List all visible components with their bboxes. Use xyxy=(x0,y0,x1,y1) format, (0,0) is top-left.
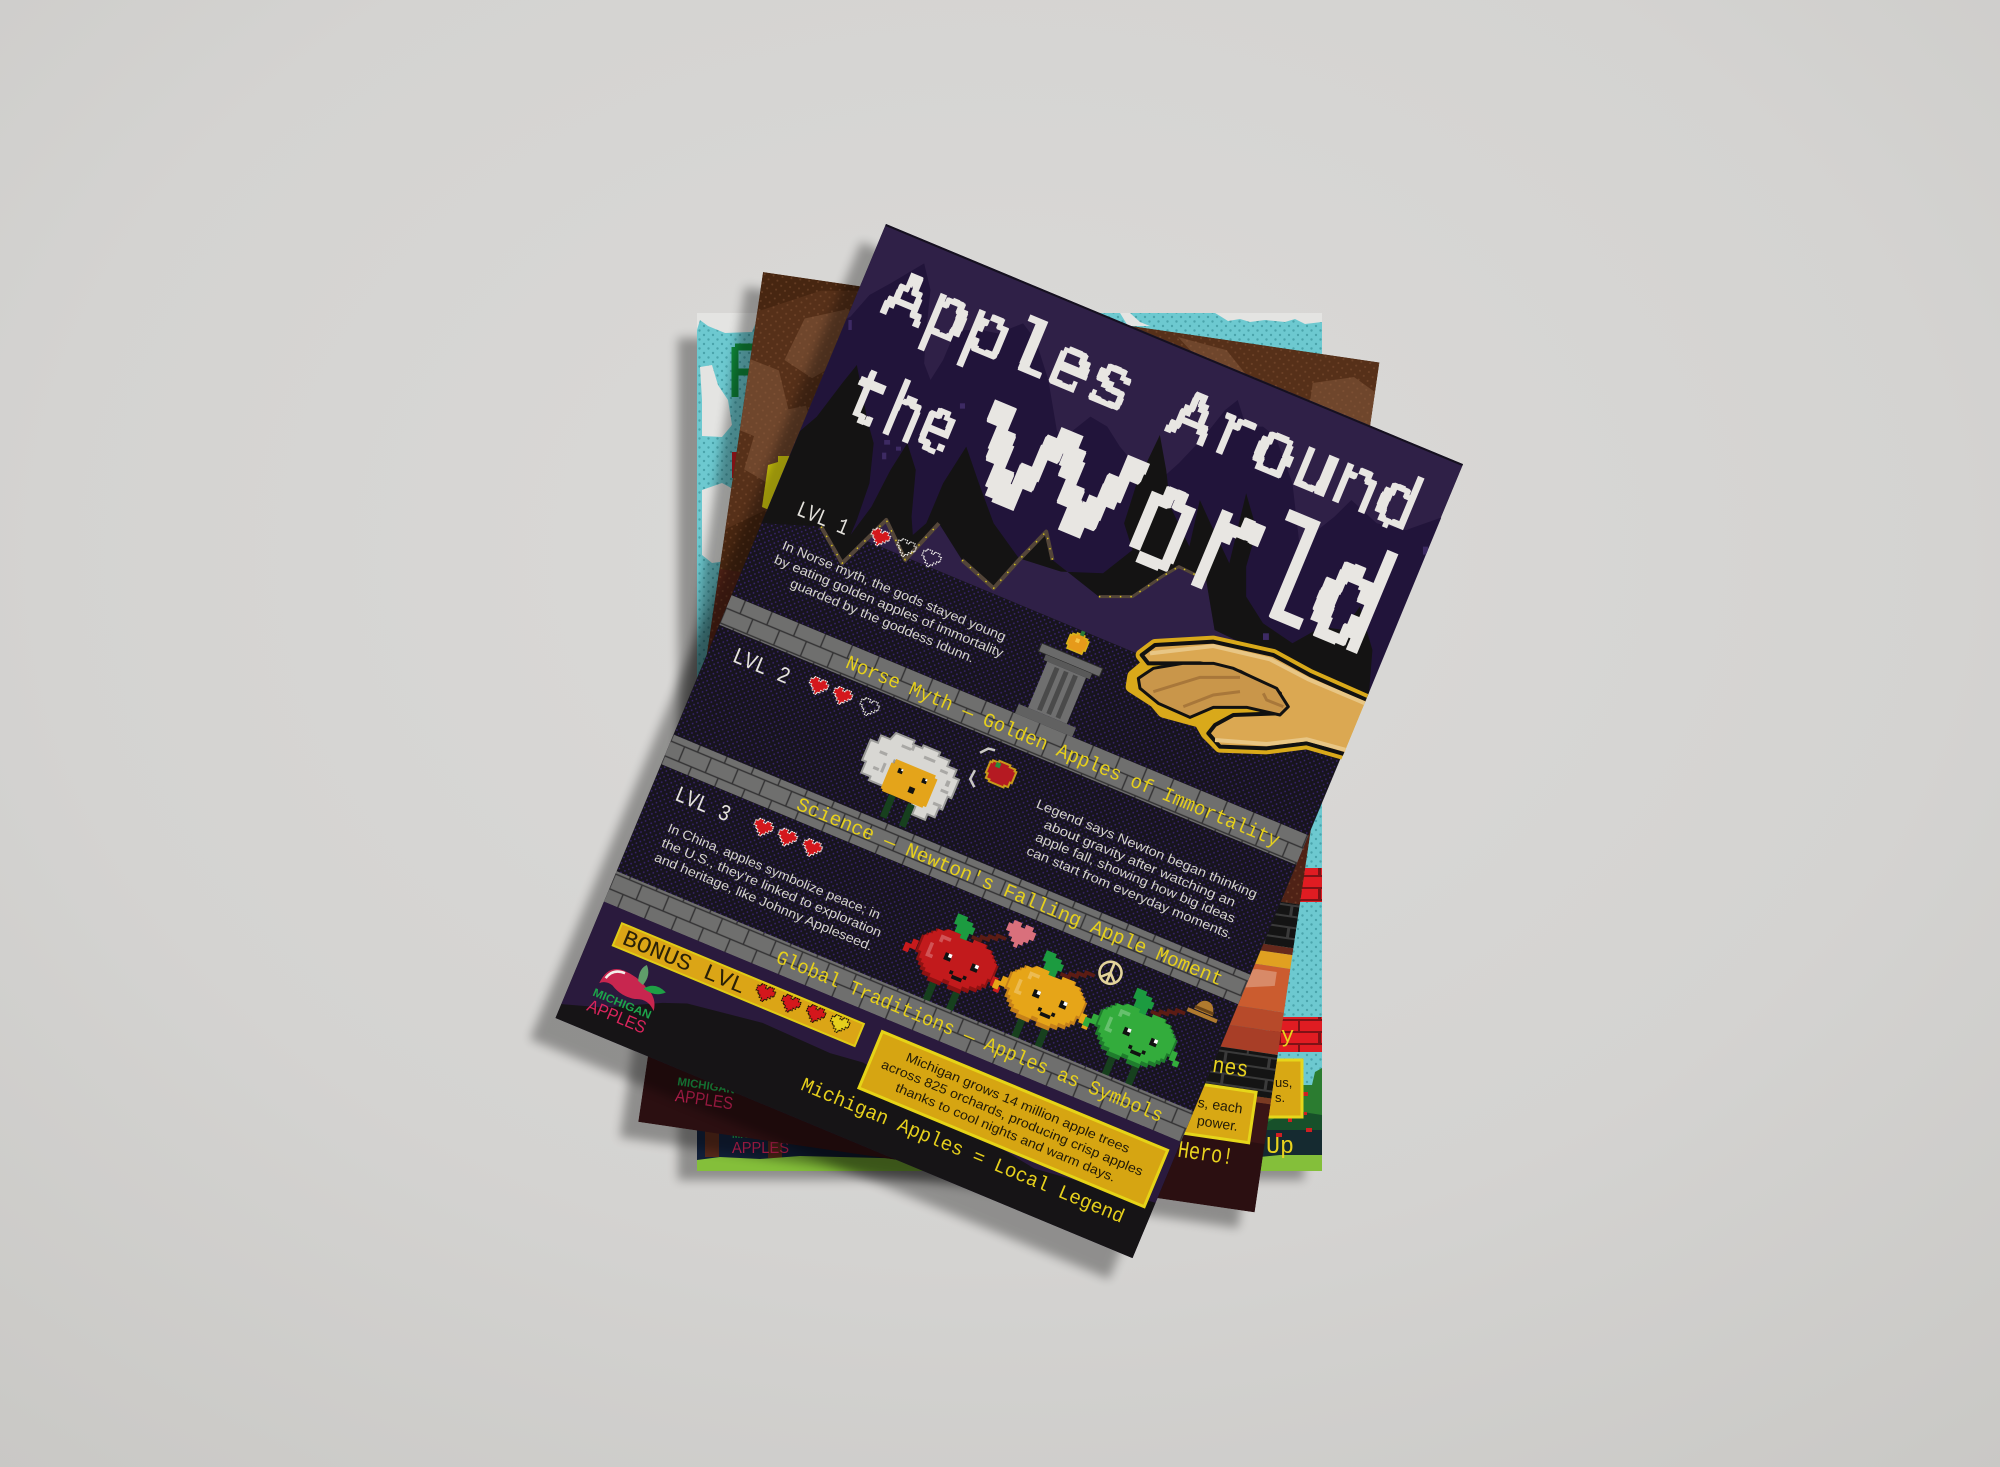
cave: rope xyxy=(821,520,1206,597)
title line 2: the xyxy=(833,355,971,479)
level 3 header xyxy=(676,786,824,857)
logo text xyxy=(732,1129,789,1157)
icon: falling apple xyxy=(968,747,1018,789)
icon: pedestal with golden apple xyxy=(1015,630,1104,737)
level 2 body text: about gravity after watching an xyxy=(1042,817,1238,910)
black brick band xyxy=(1264,902,1300,948)
bonus level bar xyxy=(612,923,864,1048)
level 1 header: LVL 1 xyxy=(793,497,853,542)
level 2 header xyxy=(733,648,880,716)
shadow: back poster xyxy=(678,338,1304,1180)
hearts xyxy=(868,527,942,570)
level 2 body text xyxy=(1027,799,1257,939)
icon: peace sign xyxy=(1096,958,1125,987)
level 1 body text: by eating golden apples of immortality xyxy=(772,552,1006,661)
black brick band 2 xyxy=(1205,1046,1278,1098)
brick band 2 xyxy=(661,735,1250,1004)
logo: Michigan Apples xyxy=(584,950,673,1039)
logo text: MICHIGAN xyxy=(732,1129,782,1141)
yellow text box xyxy=(1262,1060,1302,1117)
level 1 header xyxy=(797,501,942,568)
level 3 body text: the U.S., they're linked to exploration xyxy=(659,835,884,940)
level 1 body text: In Norse myth, the gods stayed young xyxy=(780,538,1008,644)
character: red apple xyxy=(887,899,1021,1028)
shadow: middle poster xyxy=(620,287,1362,1228)
cave: mid purple layer xyxy=(762,263,1473,703)
title line 3: orld xyxy=(1102,445,1407,691)
hero label: Hero! xyxy=(1176,1138,1235,1173)
yellow fact box: thanks to cool nights and warm days. xyxy=(893,1080,1118,1185)
level 3 body text: and heritage, like Johnny Appleseed. xyxy=(652,849,875,954)
yellow letter on bricks: y xyxy=(1281,1024,1294,1049)
red bricks xyxy=(1270,868,1322,1052)
footer tagline: Michigan Apples = Local Legend xyxy=(797,1075,1127,1230)
heading: global traditions: Global Traditions — Apples as Symbols xyxy=(772,947,1166,1129)
cave: black rock layer xyxy=(762,365,1372,703)
character: green apple xyxy=(1067,974,1200,1102)
logo text: APPLES xyxy=(732,1140,789,1157)
back poster: blue sky level xyxy=(697,313,1322,1171)
character: orange apple xyxy=(976,936,1109,1065)
yellow fact box: Michigan grows 14 million apple trees xyxy=(904,1049,1133,1156)
logo text xyxy=(674,1077,734,1109)
title line 3: W xyxy=(945,369,1163,577)
yellow box xyxy=(1184,1083,1258,1144)
level 3 body text xyxy=(652,820,890,955)
maroon ground xyxy=(638,1056,1272,1212)
level 3 header: LVL 3 xyxy=(671,782,734,828)
title line 1: Apples Around xyxy=(868,254,1433,555)
level 2 body text: Legend says Newton began thinking xyxy=(1034,796,1260,901)
logo text: MICHIGAN xyxy=(677,1076,736,1097)
yellow box: s, each xyxy=(1197,1094,1244,1116)
yellow text box: s. xyxy=(1275,1090,1285,1105)
heading: Norse myth: Norse Myth — Golden Apples of Immortality xyxy=(842,652,1283,853)
logo: Michigan Apples: MICHIGAN xyxy=(591,987,653,1022)
main poster: content xyxy=(556,224,1463,1258)
cave: specks xyxy=(848,320,1428,640)
band label: nes xyxy=(1211,1053,1250,1084)
cave: stalactites and rope xyxy=(762,263,1473,703)
icon: pointing hand xyxy=(1132,642,1387,763)
bottom hills xyxy=(556,902,1181,1258)
logo text: APPLES xyxy=(674,1085,734,1113)
hearts xyxy=(806,675,881,719)
level 2 body text: can start from everyday moments. xyxy=(1024,843,1235,942)
level 1 body text: guarded by the goddess Idunn. xyxy=(788,576,977,666)
hearts xyxy=(751,817,824,860)
character: Newton xyxy=(860,732,960,828)
middle poster: cave level xyxy=(638,272,1379,1212)
yellow text box: us, xyxy=(1275,1075,1292,1090)
yellow fragment on middle poster xyxy=(762,456,792,520)
yellow fact box xyxy=(859,1032,1168,1207)
rock blobs xyxy=(725,290,1380,530)
main poster: base with halftone xyxy=(556,224,1463,1258)
level 3 body text: In China, apples symbolize peace; in xyxy=(666,820,883,922)
icon: straw hat xyxy=(1187,995,1223,1023)
level 2 body text: apple fall, showing how big ideas xyxy=(1033,829,1238,926)
brick band 3 xyxy=(604,871,1194,1142)
brick band 1 xyxy=(719,595,1309,865)
lava bands xyxy=(1220,944,1294,1055)
clouds xyxy=(697,313,1322,563)
hearts xyxy=(753,983,851,1036)
logo: Michigan Apples: APPLES xyxy=(584,995,649,1038)
heading: science: Science — Newton's Falling Apple Moment xyxy=(793,794,1226,992)
icon: pink heart xyxy=(1001,918,1038,953)
shadow: main poster xyxy=(530,242,1438,1279)
top edge line xyxy=(885,224,1463,466)
level 2 header: LVL 2 xyxy=(728,644,794,691)
grass xyxy=(697,1155,1322,1171)
bonus level bar: BONUS LVL xyxy=(618,926,749,1000)
title xyxy=(812,254,1436,691)
yellow box: power. xyxy=(1196,1112,1239,1134)
yellow fact box: across 825 orchards, producing crisp apples xyxy=(879,1057,1146,1179)
forest xyxy=(697,1068,1322,1161)
bottom label: Up xyxy=(1266,1134,1294,1161)
letter fragment xyxy=(735,347,756,397)
